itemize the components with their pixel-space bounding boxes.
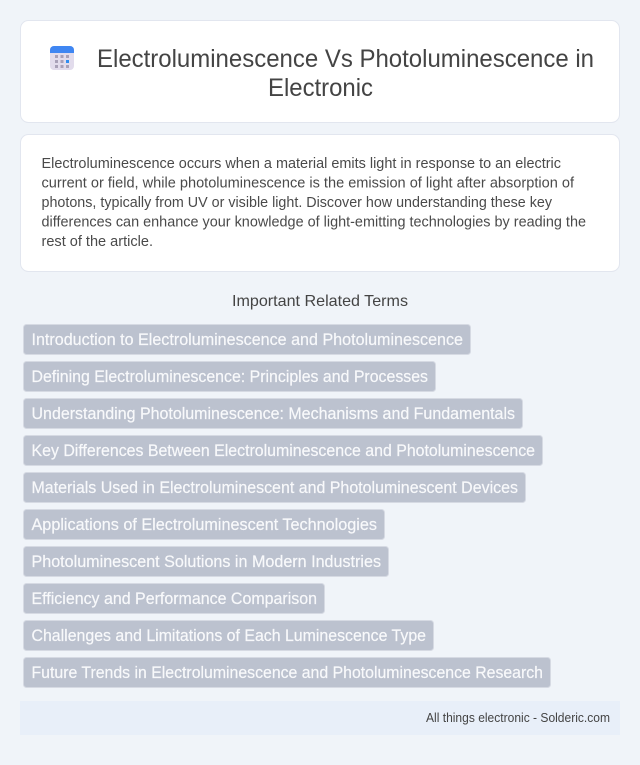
icon: calendar: [50, 46, 74, 70]
panel: introduction: [20, 134, 620, 272]
panel: title card: [20, 20, 620, 122]
intro text: differences can enhance your knowledge of light-emitting technologies by reading the: [42, 214, 586, 230]
footer: [20, 701, 620, 735]
term 5: [24, 472, 526, 502]
intro text: rest of the article.: [42, 234, 153, 250]
intro text: Electroluminescence occurs when a material emits light in response to an electric: [42, 156, 561, 172]
term 10: [24, 658, 550, 688]
term 6: [24, 510, 384, 540]
heading: important related terms: Important Related Terms: [232, 293, 408, 310]
footer: All things electronic - Solderic.com: [426, 710, 610, 725]
term 1: Introduction to Electroluminescence and Photoluminescence: [32, 331, 463, 349]
term 10: Future Trends in Electroluminescence and Photoluminescence Research: [32, 664, 543, 682]
term 8: [24, 584, 324, 614]
term 2: [24, 362, 436, 392]
term 8: Efficiency and Performance Comparison: [32, 590, 317, 608]
term 1: [24, 324, 470, 354]
term 9: Challenges and Limitations of Each Luminescence Type: [32, 627, 426, 645]
term 3: Understanding Photoluminescence: Mechanisms and Fundamentals: [32, 405, 515, 423]
title: Electroluminescence Vs Photoluminescence in: [97, 45, 594, 73]
intro text: [42, 156, 586, 250]
term 5: Materials Used in Electroluminescent and Photoluminescent Devices: [32, 479, 518, 497]
term 6: Applications of Electroluminescent Technologies: [32, 516, 377, 534]
term 9: [24, 620, 434, 650]
intro text: current or field, while photoluminescence is the emission of light after absorption of: [42, 176, 575, 192]
title: [97, 45, 594, 102]
term 7: [24, 546, 388, 576]
term 3: [24, 398, 522, 428]
title: Electronic: [268, 74, 373, 102]
intro text: photons, typically from UV or visible light. Discover how understanding these key: [42, 195, 553, 211]
term 4: [24, 436, 542, 466]
term 2: Defining Electroluminescence: Principles and Processes: [32, 368, 428, 386]
term 7: Photoluminescent Solutions in Modern Industries: [32, 553, 381, 571]
panel: related terms list: [24, 324, 550, 688]
term 4: Key Differences Between Electroluminescence and Photoluminescence: [32, 442, 535, 460]
